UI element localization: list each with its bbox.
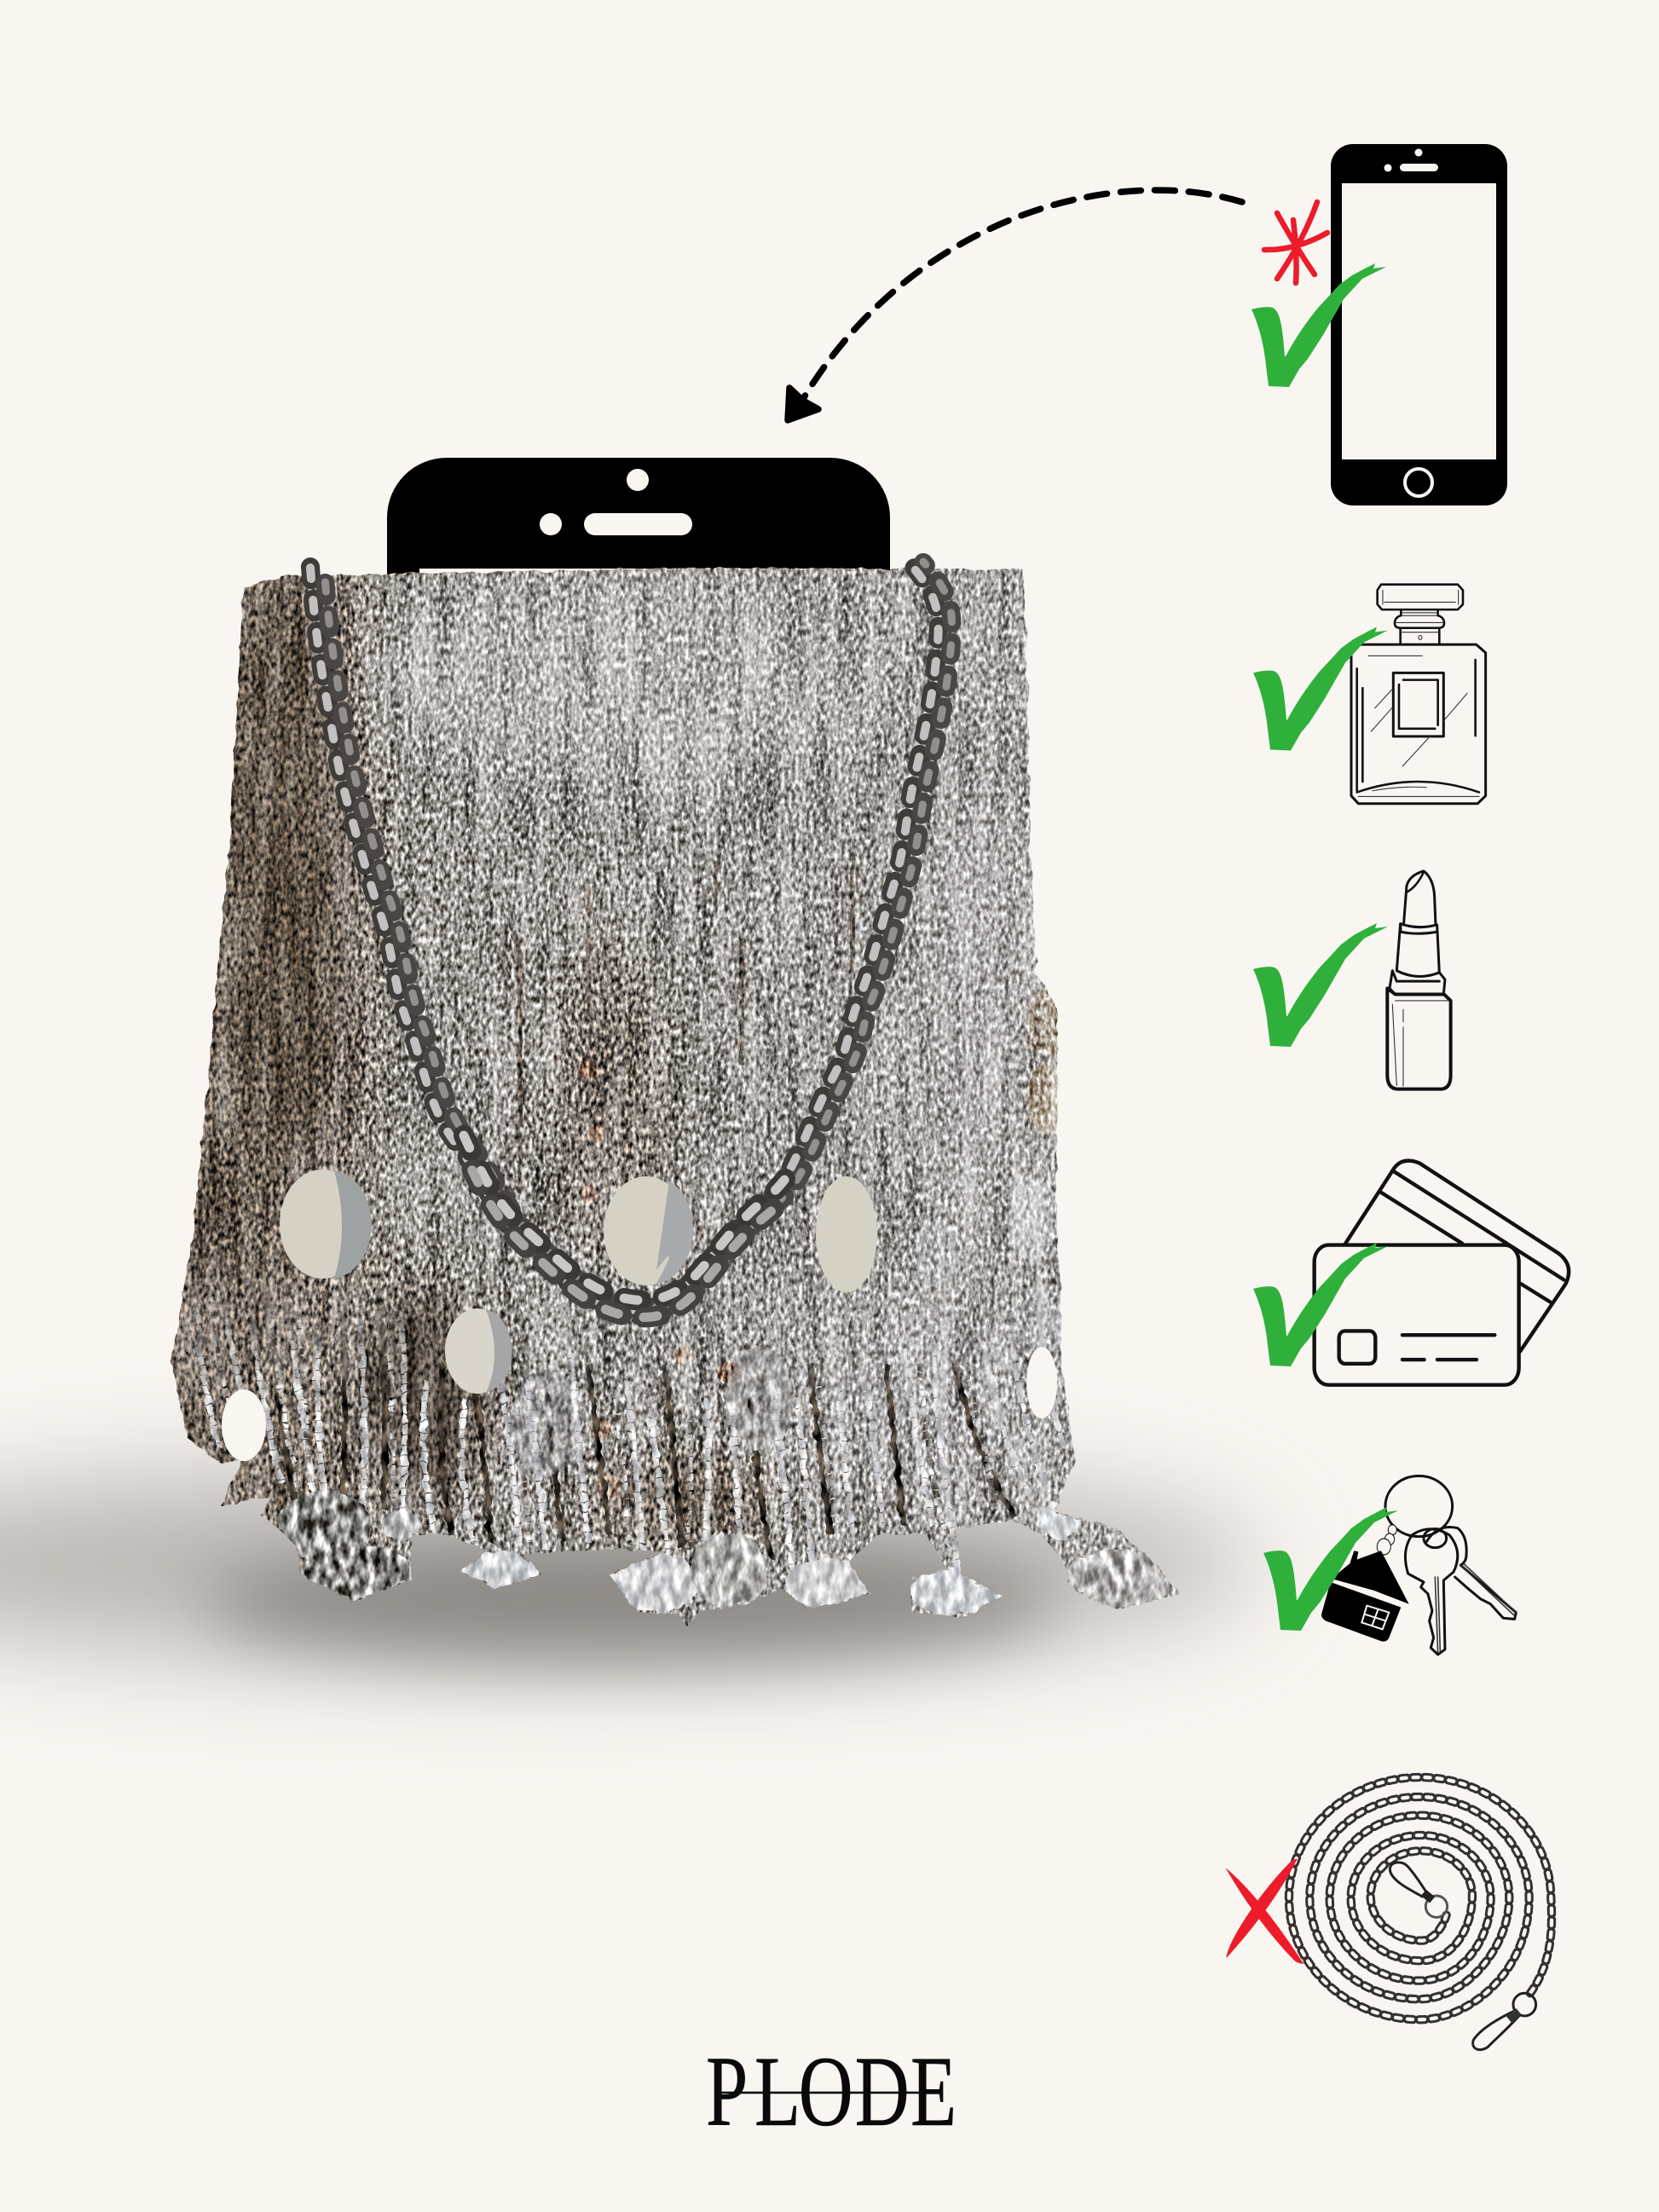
brown sequins bbox=[578, 1060, 740, 1498]
icon: red cross bbox=[1225, 1859, 1304, 1964]
icon: phone bbox=[1331, 144, 1507, 505]
bag body texture bbox=[153, 546, 1211, 1654]
check mark: phone bbox=[1251, 263, 1386, 387]
check mark: cards bbox=[1253, 1243, 1388, 1366]
side discs bbox=[1025, 989, 1059, 1056]
cut-out gaps in fringe bbox=[222, 1347, 1057, 1461]
large phone emerging from bag bbox=[387, 458, 890, 589]
icon: red asterisk bbox=[1264, 202, 1327, 283]
bag ground shadow bbox=[0, 1466, 1262, 1662]
brand logo: PLODE bbox=[706, 2036, 957, 2147]
dashed curved arrow bbox=[788, 190, 1242, 420]
sequin discs bbox=[280, 1170, 877, 1394]
bag chain strap bbox=[310, 562, 952, 1317]
icon: keys with house fob bbox=[1321, 1476, 1516, 1655]
icon: coiled chain with clasps bbox=[1289, 1777, 1552, 2050]
icon: credit cards bbox=[1315, 1161, 1569, 1385]
check mark: perfume bbox=[1253, 627, 1388, 750]
icon: perfume bottle bbox=[1351, 585, 1486, 804]
check mark: keys bbox=[1263, 1507, 1398, 1631]
icon: lipstick bbox=[1387, 871, 1451, 1089]
check mark: lipstick bbox=[1253, 923, 1388, 1047]
beaded fringe bag bbox=[153, 546, 1211, 1654]
lower beaded strands and discs bbox=[197, 1245, 1174, 1615]
